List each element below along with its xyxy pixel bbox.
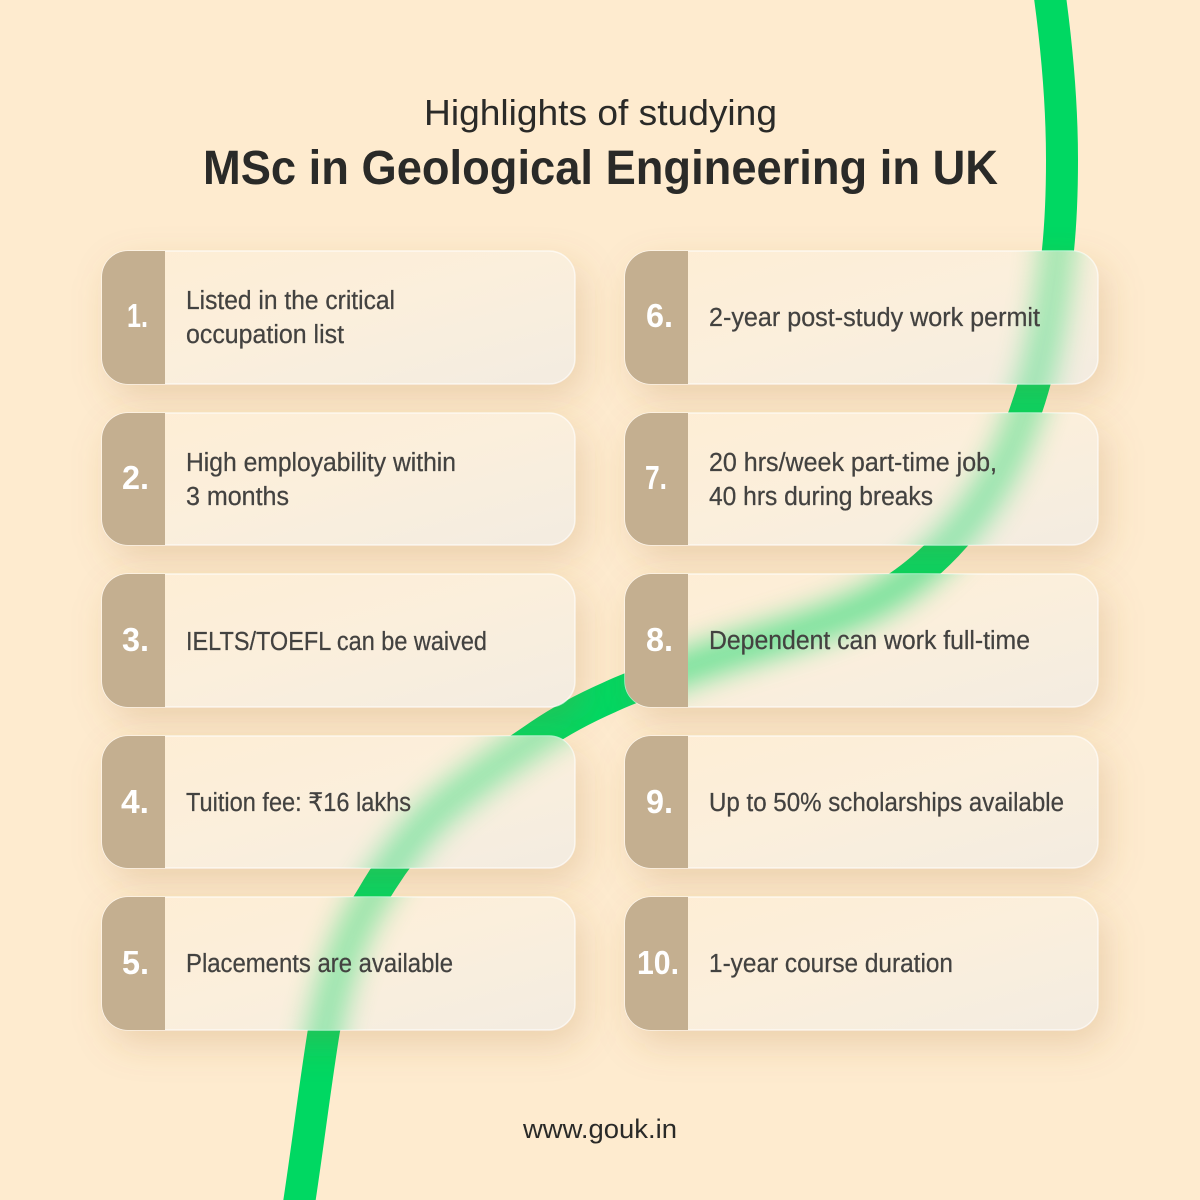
number tab 1 [102,251,165,384]
card 10 [625,897,1098,1030]
text 8: Dependent can work full-time [709,627,1030,655]
blurred ribbon behind card 6 [998,251,1091,384]
text 2: 3 months [186,483,289,511]
number 10: 10. [637,944,679,981]
number tab 3 [102,574,165,707]
text 4: Tuition fee: ₹16 lakhs [186,789,411,817]
number tab 6 [625,251,688,384]
text 1: occupation list [186,321,344,349]
number 9: 9. [646,783,673,820]
number 2: 2. [122,459,149,496]
title line 1: Highlights of studying [424,92,777,133]
text 7: 20 hrs/week part-time job, [709,449,997,477]
blurred ribbon behind card 7 [896,413,1062,545]
text 2: High employability within [186,449,456,477]
number tab 9 [625,736,688,868]
blurred ribbon behind card 4 [349,736,574,868]
card 4 [101,735,576,869]
number tab 8 [625,574,688,707]
number 8: 8. [646,621,673,658]
blurred ribbon behind card 5 [289,897,413,1030]
number 6: 6. [646,297,673,334]
number 7: 7. [645,459,667,496]
text 3: IELTS/TOEFL can be waived [186,628,487,656]
number tab 7 [625,413,688,545]
blurred ribbon behind card 8 [625,574,969,707]
card 7 [624,412,1099,546]
card 6 [624,250,1099,385]
card 2 [102,413,575,545]
card 5 [101,896,576,1031]
text 9: Up to 50% scholarships available [709,789,1064,817]
number 3: 3. [122,621,149,658]
green curved ribbon [298,0,1062,1200]
text 5: Placements are available [186,950,453,978]
text 7: 40 hrs during breaks [709,483,933,511]
number tab 4 [102,736,165,868]
website footer: www.gouk.in [522,1114,677,1144]
title [203,92,998,195]
number 5: 5. [122,944,149,981]
text 10: 1-year course duration [709,950,953,978]
card 1 [102,251,575,384]
number tab 5 [102,897,165,1030]
number 4: 4. [121,783,149,820]
card 3 [102,574,575,707]
number tab 2 [102,413,165,545]
text 1: Listed in the critical [186,287,395,315]
title line 2: MSc in Geological Engineering in UK [203,142,998,195]
card 8 [624,573,1099,708]
number 1: 1. [127,297,148,334]
card 9 [625,736,1098,868]
number tab 10 [625,897,688,1030]
text 6: 2-year post-study work permit [709,304,1040,332]
